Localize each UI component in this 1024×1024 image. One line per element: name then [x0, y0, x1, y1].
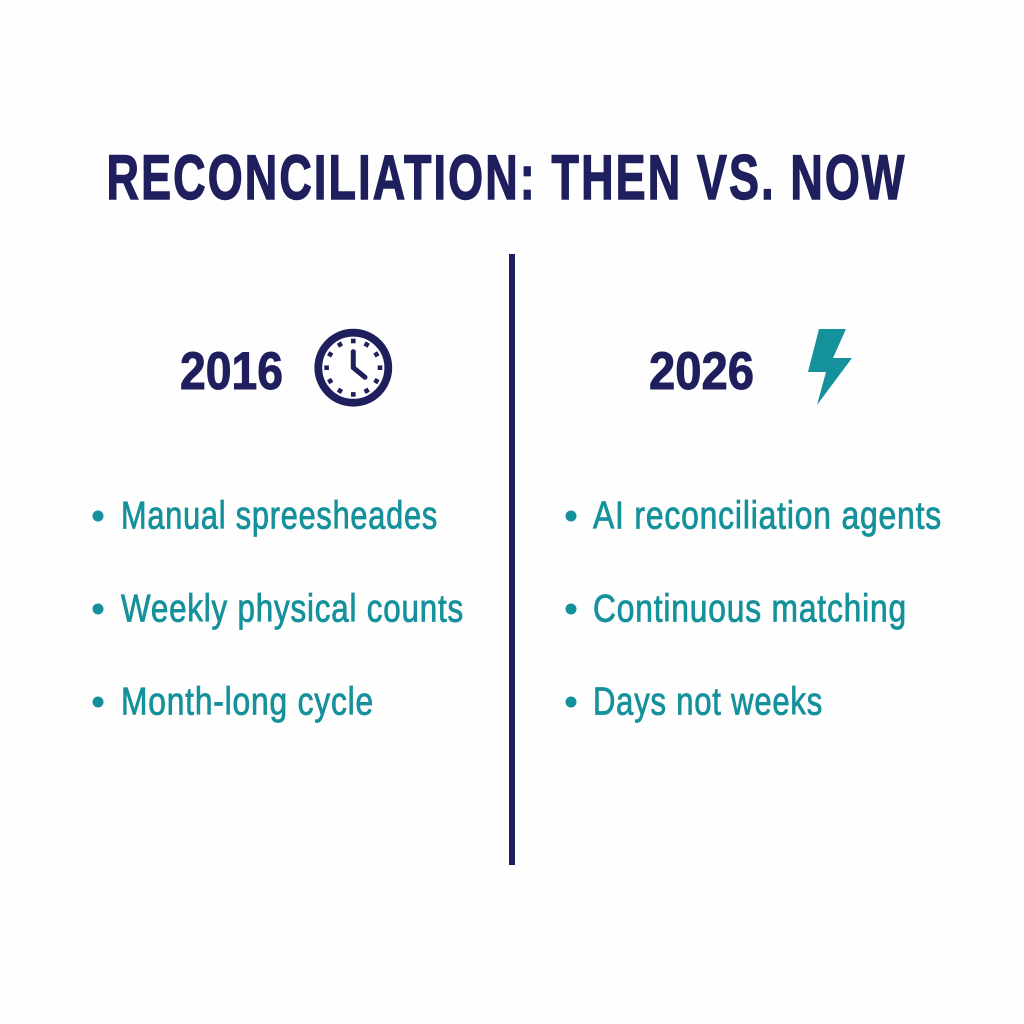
- item: weekly counts: Weekly physical counts: [121, 588, 464, 630]
- item: month-long cycle: Month-long cycle: [121, 680, 374, 724]
- icon: clock: [318, 333, 388, 403]
- icon: lightning bolt: [808, 329, 852, 405]
- item: AI agents: AI reconciliation agents: [593, 494, 942, 538]
- list: 2026 items: [566, 494, 942, 724]
- center divider: [509, 254, 515, 865]
- 2016 year heading: 2016: [180, 342, 283, 401]
- 2026 year heading: 2026: [649, 342, 754, 401]
- panel: 2026: [566, 329, 942, 724]
- list: 2016 items: [92, 494, 464, 724]
- panel: 2016: [92, 333, 464, 724]
- item: continuous matching: Continuous matching: [593, 588, 907, 630]
- item: days not weeks: Days not weeks: [593, 680, 823, 724]
- item: manual spreadsheets: Manual spreesheades: [121, 494, 438, 538]
